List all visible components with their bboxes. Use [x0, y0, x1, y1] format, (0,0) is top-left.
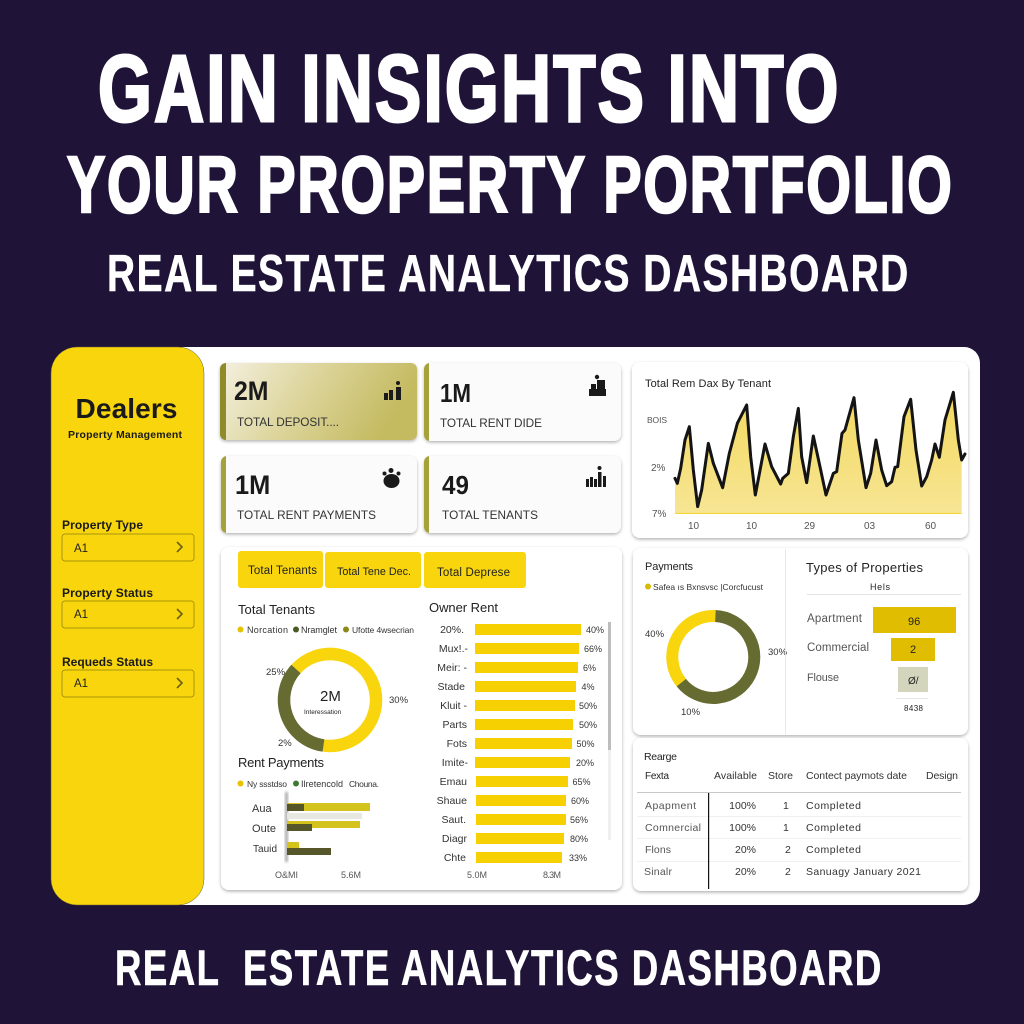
table rows: 1 — [783, 822, 789, 834]
y axis labels: BOIS — [647, 415, 667, 425]
table rows — [644, 800, 921, 878]
KPI card: total tenants: 49 — [442, 471, 469, 500]
table rows: Completed — [806, 844, 861, 856]
table rows: Completed — [806, 800, 861, 812]
table rows: 100% — [729, 800, 756, 812]
table rows: 20% — [735, 844, 756, 856]
bar chart: owner rent: 50% — [576, 739, 595, 749]
tab: total tenants — [238, 551, 323, 588]
legend: payments: Safea ıs Bxnsvsc |Corcfucust — [653, 582, 764, 592]
filter: requests status: A1 — [74, 678, 88, 690]
legend: rent payments — [238, 779, 379, 789]
chart title: Total Rem Dax By Tenant — [645, 378, 771, 390]
bar chart: owner rent: 50% — [579, 701, 597, 711]
table title: Rearge — [644, 751, 677, 763]
bar chart: owner rent: Meir: - — [437, 662, 468, 674]
bar chart: owner rent: Saut. — [441, 814, 466, 826]
table rows: 20% — [735, 866, 756, 878]
bar chart: rent payments: Oute — [252, 823, 276, 835]
KPI card: total tenants — [424, 456, 621, 533]
donut chart: payments: 40% — [645, 629, 665, 640]
table rows: 2 — [785, 844, 791, 856]
bar chart: owner rent: Parts — [442, 719, 467, 731]
table header — [645, 770, 958, 782]
filter: property status: Property Status — [62, 586, 153, 600]
legend: rent payments: Ilretencold — [301, 779, 343, 789]
sidebar — [51, 347, 204, 905]
filter: property type — [62, 518, 194, 561]
area line chart — [675, 392, 965, 513]
bar chart: owner rent: 4% — [582, 682, 595, 692]
table header: Store — [768, 770, 793, 782]
x axis labels: 03 — [864, 521, 876, 532]
donut chart: total tenants — [266, 654, 409, 749]
donut chart: total tenants: 2% — [278, 738, 292, 749]
table rows: 100% — [729, 822, 756, 834]
x axis labels: 10 — [688, 521, 700, 532]
icon: people — [589, 375, 606, 396]
tab: total tenants: Total Tenants — [248, 565, 317, 577]
x axis labels: 29 — [804, 521, 816, 532]
bar chart: owner rent: Emau — [440, 776, 467, 788]
bar chart: owner rent: 8.3M — [543, 870, 561, 880]
icon: paw — [382, 468, 400, 488]
funnel chart: property types: Ø/ — [908, 676, 919, 687]
footer title: REAL ESTATE ANALYTICS DASHBOARD — [115, 940, 883, 996]
tab: total tene dec — [325, 552, 421, 588]
y axis labels — [647, 415, 667, 520]
column label: Hels — [870, 582, 890, 592]
bar chart: owner rent: 20%. — [440, 624, 464, 636]
donut chart: total tenants: Interessation — [304, 709, 342, 716]
icon: bars — [384, 381, 401, 400]
KPI card: total deposit: TOTAL DEPOSIT.... — [237, 415, 339, 429]
bar chart: owner rent: Diagr — [442, 833, 468, 845]
bar chart: owner rent: 66% — [584, 644, 602, 654]
bar chart: owner rent: Chte — [444, 852, 466, 864]
heading: types of properties: Types of Properties — [806, 560, 924, 575]
sidebar title: Dealers — [76, 393, 178, 424]
x axis labels: 10 — [746, 521, 758, 532]
panel: tenants and rent — [221, 547, 622, 890]
table header: Contect paymots date — [806, 770, 907, 782]
subtitle: REAL ESTATE ANALYTICS DASHBOARD — [107, 243, 910, 302]
icon: bars — [586, 466, 606, 487]
bar chart: rent payments: Tauid — [253, 844, 277, 855]
heading: payments: Payments — [645, 561, 694, 573]
legend: rent payments: Chouna. — [349, 779, 379, 789]
donut chart: total tenants: 2M — [320, 688, 341, 705]
bar chart: rent payments: Aua — [252, 803, 272, 815]
table rows: Sanuagy January 2021 — [806, 866, 921, 878]
table rows: Completed — [806, 822, 861, 834]
table rows: Sinalr — [644, 866, 672, 878]
legend: total tenants — [238, 625, 414, 635]
filter: property type: Property Type — [62, 518, 143, 532]
funnel chart: property types: 2 — [910, 644, 916, 656]
tab: total deprese — [424, 552, 526, 588]
bar chart: owner rent: 20% — [576, 758, 594, 768]
KPI card: total deposit — [220, 363, 417, 440]
tab: total deprese: Total Deprese — [437, 567, 510, 579]
heading: owner rent: Owner Rent — [429, 600, 498, 615]
donut chart: payments: 10% — [681, 707, 701, 718]
bar chart: owner rent: Kluit - — [440, 700, 467, 712]
bar chart: owner rent: Shaue — [437, 795, 467, 807]
donut chart: payments: 30% — [768, 647, 788, 658]
title: YOUR PROPERTY PORTFOLIO — [67, 140, 954, 229]
panel: table — [633, 738, 968, 891]
bar chart: owner rent: 5.0M — [467, 870, 487, 880]
filter: requests status — [62, 655, 194, 697]
bar chart: owner rent: 6% — [583, 663, 596, 673]
sidebar subtitle: Property Management — [68, 429, 182, 441]
dashboard panel — [51, 347, 980, 905]
filter: requests status: Requeds Status — [62, 655, 153, 669]
funnel chart: property types: Commercial — [807, 642, 869, 654]
title — [67, 35, 954, 229]
filter: property type: A1 — [74, 543, 88, 555]
KPI card: total rent dide: TOTAL RENT DIDE — [440, 416, 542, 430]
table rows: 2 — [785, 866, 791, 878]
legend: total tenants: Nramglet — [301, 625, 337, 635]
bar chart: owner rent: 80% — [570, 834, 588, 844]
table header: Fexta — [645, 771, 669, 782]
tab: total tene dec: Total Tene Dec. — [337, 566, 411, 578]
heading: rent payments: Rent Payments — [238, 755, 324, 770]
funnel chart: property types: Apartment — [807, 613, 863, 625]
donut chart: payments — [645, 616, 788, 718]
KPI card: total rent payments: 1M — [235, 469, 270, 500]
bar chart: owner rent: Fots — [447, 738, 467, 750]
table rows: Flons — [645, 844, 671, 856]
KPI card: total tenants: TOTAL TENANTS — [442, 508, 538, 522]
x axis labels: 60 — [925, 521, 937, 532]
funnel chart: property types: 96 — [908, 616, 920, 628]
KPI card: total rent payments — [221, 456, 417, 533]
title: GAIN INSIGHTS INTO — [98, 35, 841, 142]
table rows: Comnercial — [645, 822, 701, 834]
table header: Available — [714, 770, 757, 782]
filter: property status — [62, 586, 194, 628]
funnel chart: property types: 8438 — [904, 704, 924, 713]
bar chart: rent payments: O&MI — [275, 870, 298, 880]
legend: total tenants: Norcation — [247, 625, 288, 635]
heading: total tenants: Total Tenants — [238, 602, 316, 617]
table header: Design — [926, 770, 958, 782]
legend: total tenants: Ufotte 4wsecrian — [352, 625, 414, 635]
y axis labels: 7% — [652, 509, 667, 520]
KPI card: total rent payments: TOTAL RENT PAYMENTS — [237, 508, 376, 522]
filter: property status: A1 — [74, 609, 88, 621]
bar chart: owner rent: Stade — [438, 681, 465, 693]
funnel chart: property types: Flouse — [807, 672, 839, 684]
bar chart: owner rent: Mux!.- — [439, 643, 468, 655]
KPI card: total rent dide — [424, 363, 621, 441]
funnel chart: property types — [807, 607, 956, 713]
donut chart: total tenants: 25% — [266, 667, 286, 678]
bar chart: owner rent: 65% — [572, 777, 591, 787]
bar chart: owner rent: 33% — [569, 853, 587, 863]
x axis labels — [688, 521, 937, 532]
bar chart: owner rent: 56% — [570, 815, 588, 825]
bar chart: owner rent: 40% — [586, 625, 604, 635]
bar chart: rent payments: 5.6M — [341, 870, 361, 880]
KPI card: total deposit: 2M — [234, 377, 269, 406]
panel: payments and property types — [633, 548, 968, 735]
KPI card: total rent dide: 1M — [440, 379, 471, 408]
table rows: 1 — [783, 800, 789, 812]
bar chart: owner rent: Imite- — [442, 757, 469, 769]
bar chart: owner rent — [437, 622, 611, 880]
table rows: Apapment — [645, 800, 696, 812]
panel: line chart — [632, 362, 968, 538]
bar chart: owner rent: 50% — [579, 720, 597, 730]
y axis labels: 2% — [651, 463, 666, 474]
legend: rent payments: Ny ssstdso — [247, 779, 287, 789]
bar chart: rent payments — [252, 792, 370, 880]
bar chart: owner rent: 60% — [571, 796, 589, 806]
donut chart: total tenants: 30% — [389, 695, 409, 706]
